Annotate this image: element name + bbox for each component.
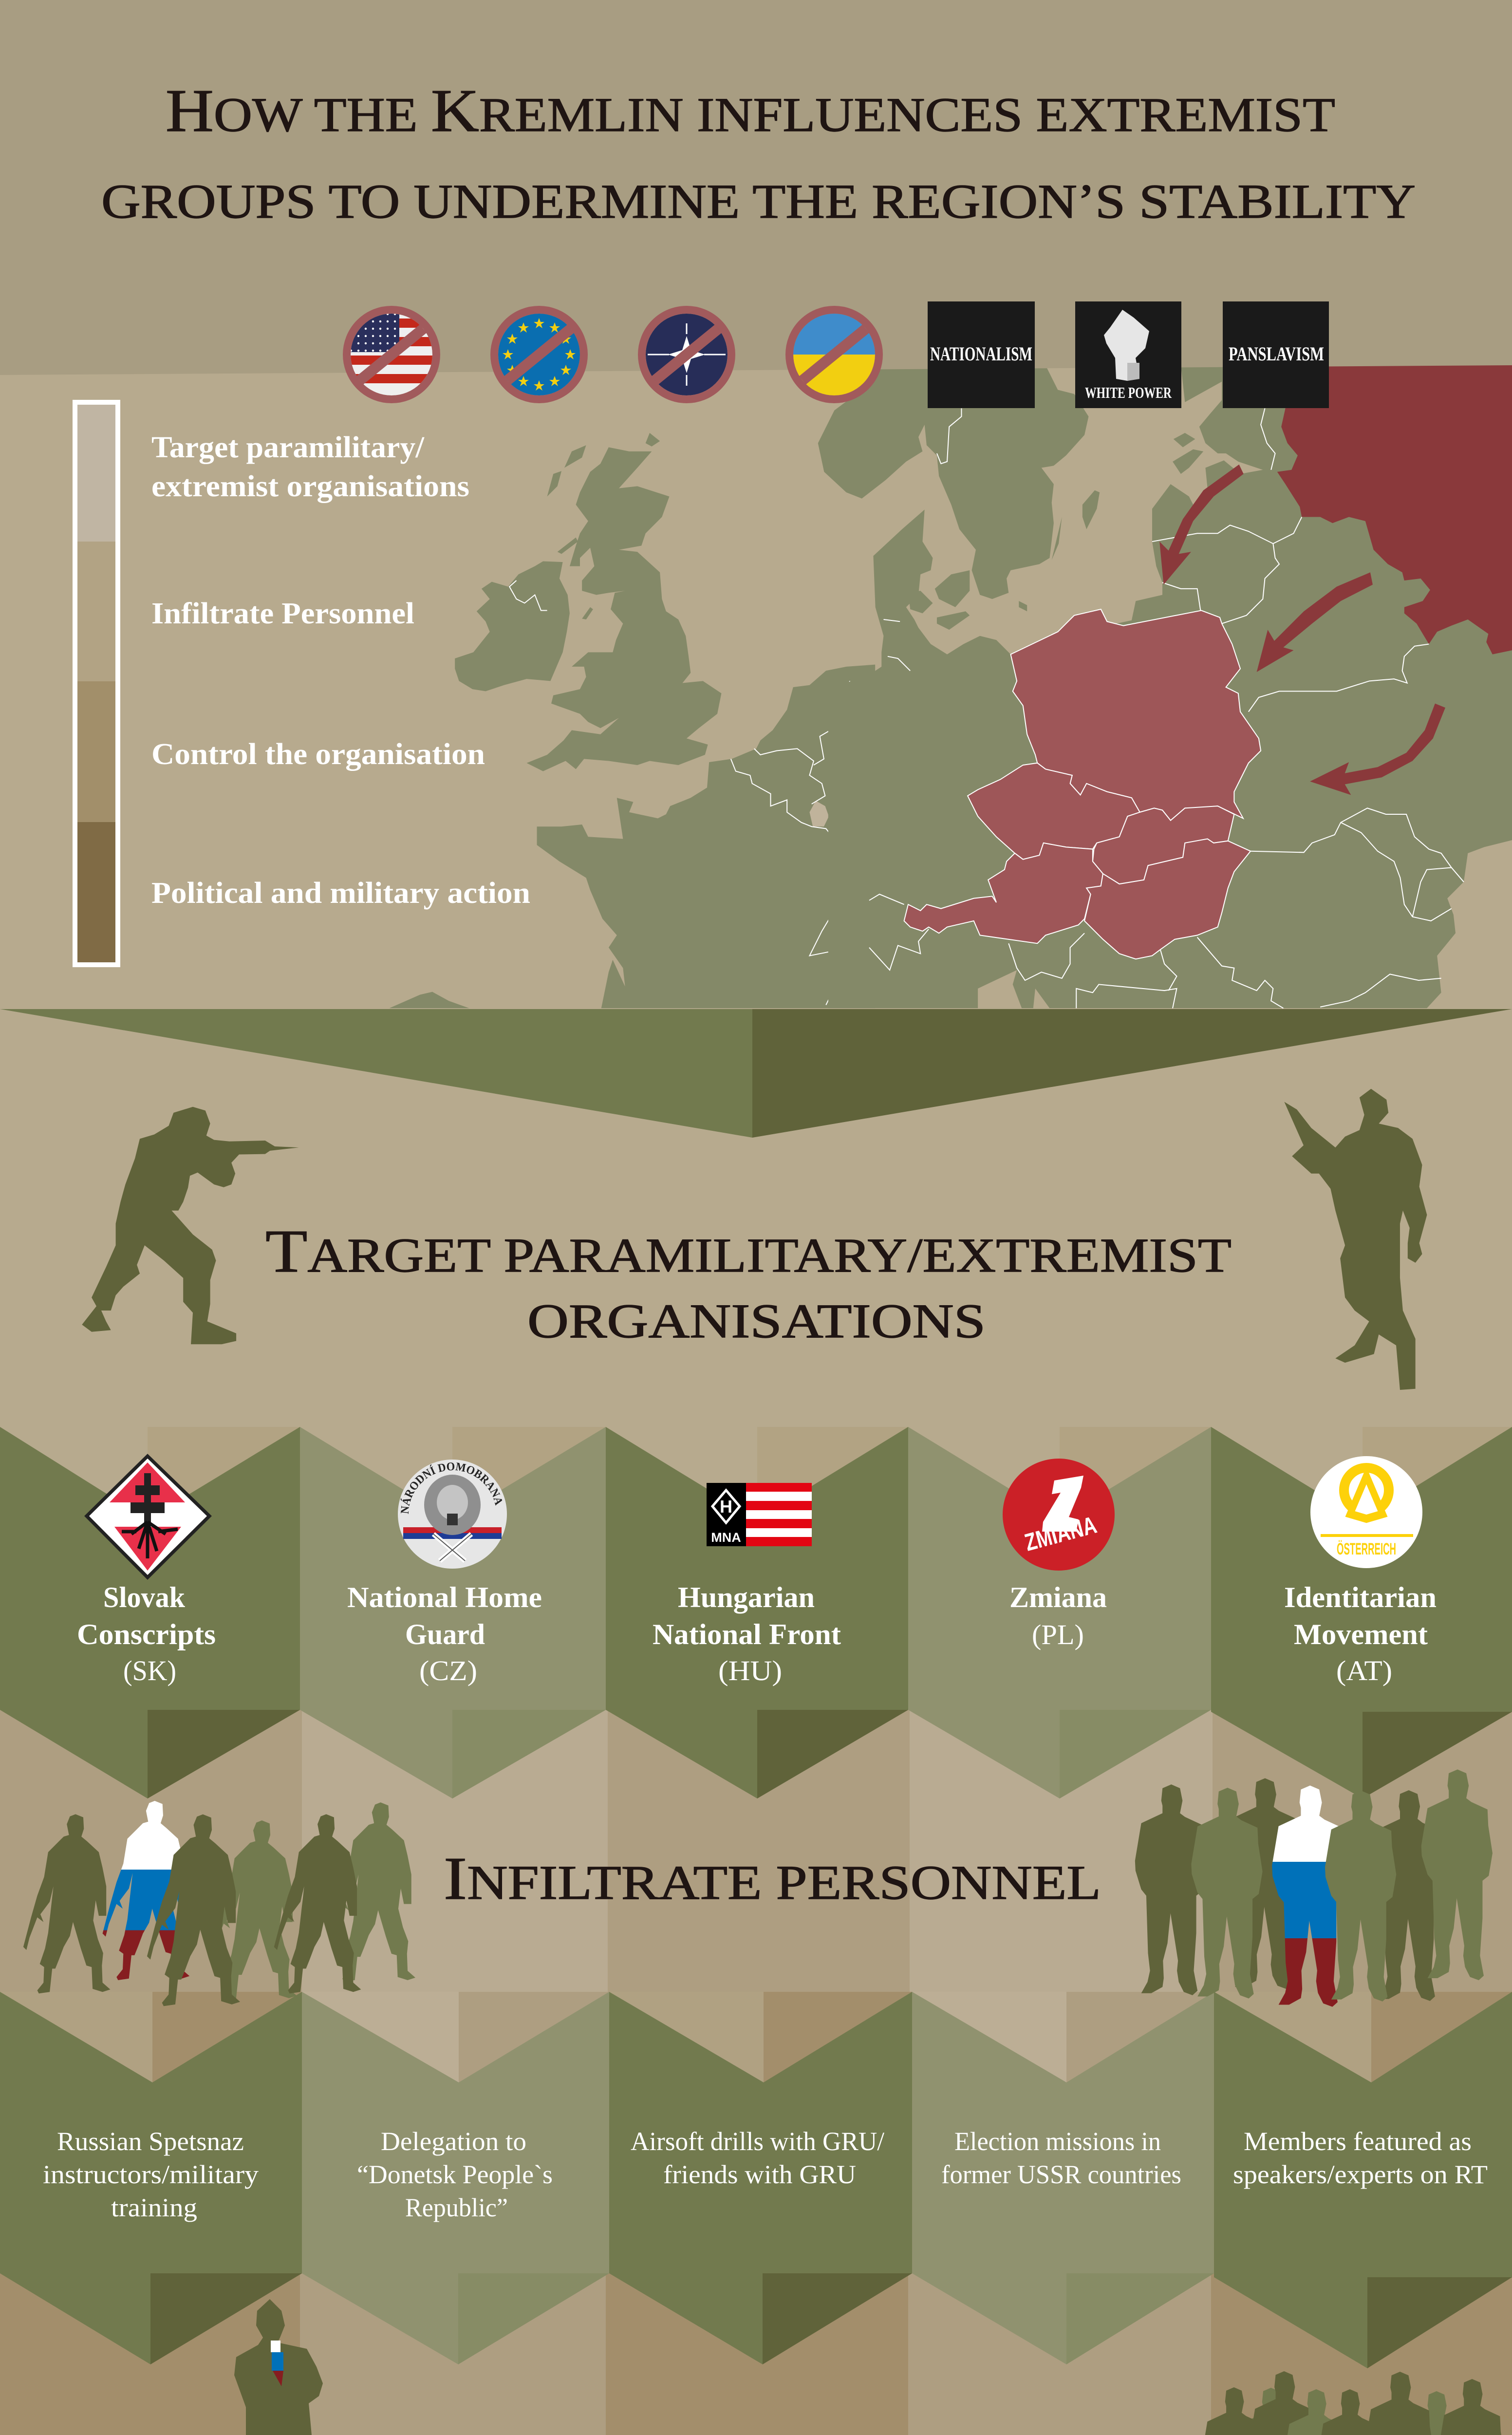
box: white power: WHITE POWER [1085,384,1172,401]
logo: Identitarian Movement [1310,1456,1422,1568]
logo: Hungarian National Front: MNA [711,1530,741,1545]
map: central and eastern Europe [818,365,1512,1008]
org label: Hungarian National Front (HU): National Front [653,1618,841,1650]
panel: infiltrate chevrons [0,1992,1512,2368]
icon: no USA [347,310,436,399]
org label: Identitarian Movement (AT) [1284,1581,1437,1686]
org label: Zmiana (PL): (PL) [1032,1619,1084,1650]
text: infiltrate items: Republic” [405,2193,508,2222]
org label: Zmiana (PL): Zmiana [1009,1581,1107,1613]
logo: Identitarian Movement: ÖSTERREICH [1337,1540,1396,1558]
icon: leader with microphone and tie [234,2299,323,2435]
logo: Zmiana [1003,1459,1115,1571]
org label: Slovak Conscripts (SK): (SK) [123,1655,176,1686]
text: infiltrate items: Members featured as [1244,2127,1472,2156]
heading: target: TARGET PARAMILITARY/EXTREMIST [265,1218,1232,1285]
org label: Slovak Conscripts (SK): Slovak [103,1581,186,1613]
legend: process stages: Target paramilitary/ [151,431,425,464]
org label: Identitarian Movement (AT): Movement [1294,1618,1428,1650]
text: infiltrate items: training [111,2193,197,2222]
icon: no Ukraine [789,310,879,399]
logo: Slovak Conscripts [87,1456,209,1577]
text: infiltrate items: “Donetsk People`s [357,2160,553,2189]
icon: soldier aiming rifle [82,1107,299,1344]
text: infiltrate items: former USSR countries [941,2160,1181,2189]
legend: process stages: Control the organisation [151,738,485,771]
arrow: Russia toward Ukraine [1310,704,1445,795]
legend: process stages: extremist organisations [151,470,469,503]
text: infiltrate items: Airsoft drills with GRU/ [631,2127,884,2156]
icon: soldier standing with rifle [1284,1089,1427,1390]
box: panslavism: PANSLAVISM [1229,343,1324,365]
box: white power [1075,301,1181,408]
org label: Hungarian National Front (HU): Hungarian [678,1581,815,1613]
box: nationalism: NATIONALISM [930,343,1032,365]
org label: National Home Guard (CZ) [347,1581,542,1686]
org label: Hungarian National Front (HU): (HU) [718,1655,782,1686]
text: infiltrate items: speakers/experts on RT [1233,2160,1488,2189]
box: nationalism [928,301,1035,408]
org label: National Home Guard (CZ): (CZ) [419,1655,477,1686]
org label: National Home Guard (CZ): National Home [347,1581,542,1613]
text: infiltrate items: instructors/military [43,2160,259,2189]
map of Europe [389,365,1512,1008]
heading: target: ORGANISATIONS [527,1294,986,1348]
map: western Europe [389,433,875,1008]
org label: National Home Guard (CZ): Guard [405,1618,485,1650]
panel: organisations chevrons [0,1427,1512,1798]
arrow: Russia toward Baltics [1159,465,1244,584]
title [101,77,1416,228]
logo: National Home Guard: NÁRODNÍ DOMOBRANA [400,1462,503,1514]
logo: Hungarian National Front: H [720,1497,732,1517]
title: GROUPS TO UNDERMINE THE REGION’S STABILITY [101,174,1416,228]
logo: Hungarian National Front [707,1483,812,1546]
top band [0,0,1512,375]
Russia [1277,365,1512,655]
legend: process stages: Infiltrate Personnel [151,597,414,630]
icon: no NATO [642,310,731,399]
box: panslavism [1223,301,1329,408]
banner: downward arrow [0,1009,1512,1138]
legend: process stages [73,400,530,967]
org label: Zmiana (PL) [1009,1581,1107,1650]
heading: infiltrate personnel: INFILTRATE PERSONNEL [444,1845,1101,1912]
org label: Identitarian Movement (AT): Identitarian [1284,1581,1437,1613]
logo: Zmiana: ZMIANA [1022,1511,1100,1556]
text: infiltrate items [43,2127,1488,2222]
icon: no EU [494,310,584,399]
text: infiltrate items: Election missions in [954,2127,1161,2156]
org label: Slovak Conscripts (SK) [77,1581,216,1686]
icon: group of soldiers with Russian flag [23,1801,415,2006]
icon: group of suited men with Russian flag [1135,1769,1493,2007]
heading: target [265,1218,1232,1348]
org label: Slovak Conscripts (SK): Conscripts [77,1618,216,1650]
logo: National Home Guard [398,1460,507,1569]
icon: crowd of men [1202,2371,1505,2435]
text: infiltrate items: Russian Spetsnaz [57,2127,244,2156]
section backgrounds [0,1427,1512,2435]
text: infiltrate items: Delegation to [381,2127,526,2156]
arrow: Russia toward Poland [1257,572,1373,672]
text: infiltrate items: friends with GRU [663,2160,856,2189]
org label: Identitarian Movement (AT): (AT) [1336,1655,1392,1686]
title: HOW THE KREMLIN INFLUENCES EXTREMIST [166,77,1335,145]
org label: Hungarian National Front (HU) [653,1581,841,1686]
legend: process stages: Political and military action [151,877,530,910]
